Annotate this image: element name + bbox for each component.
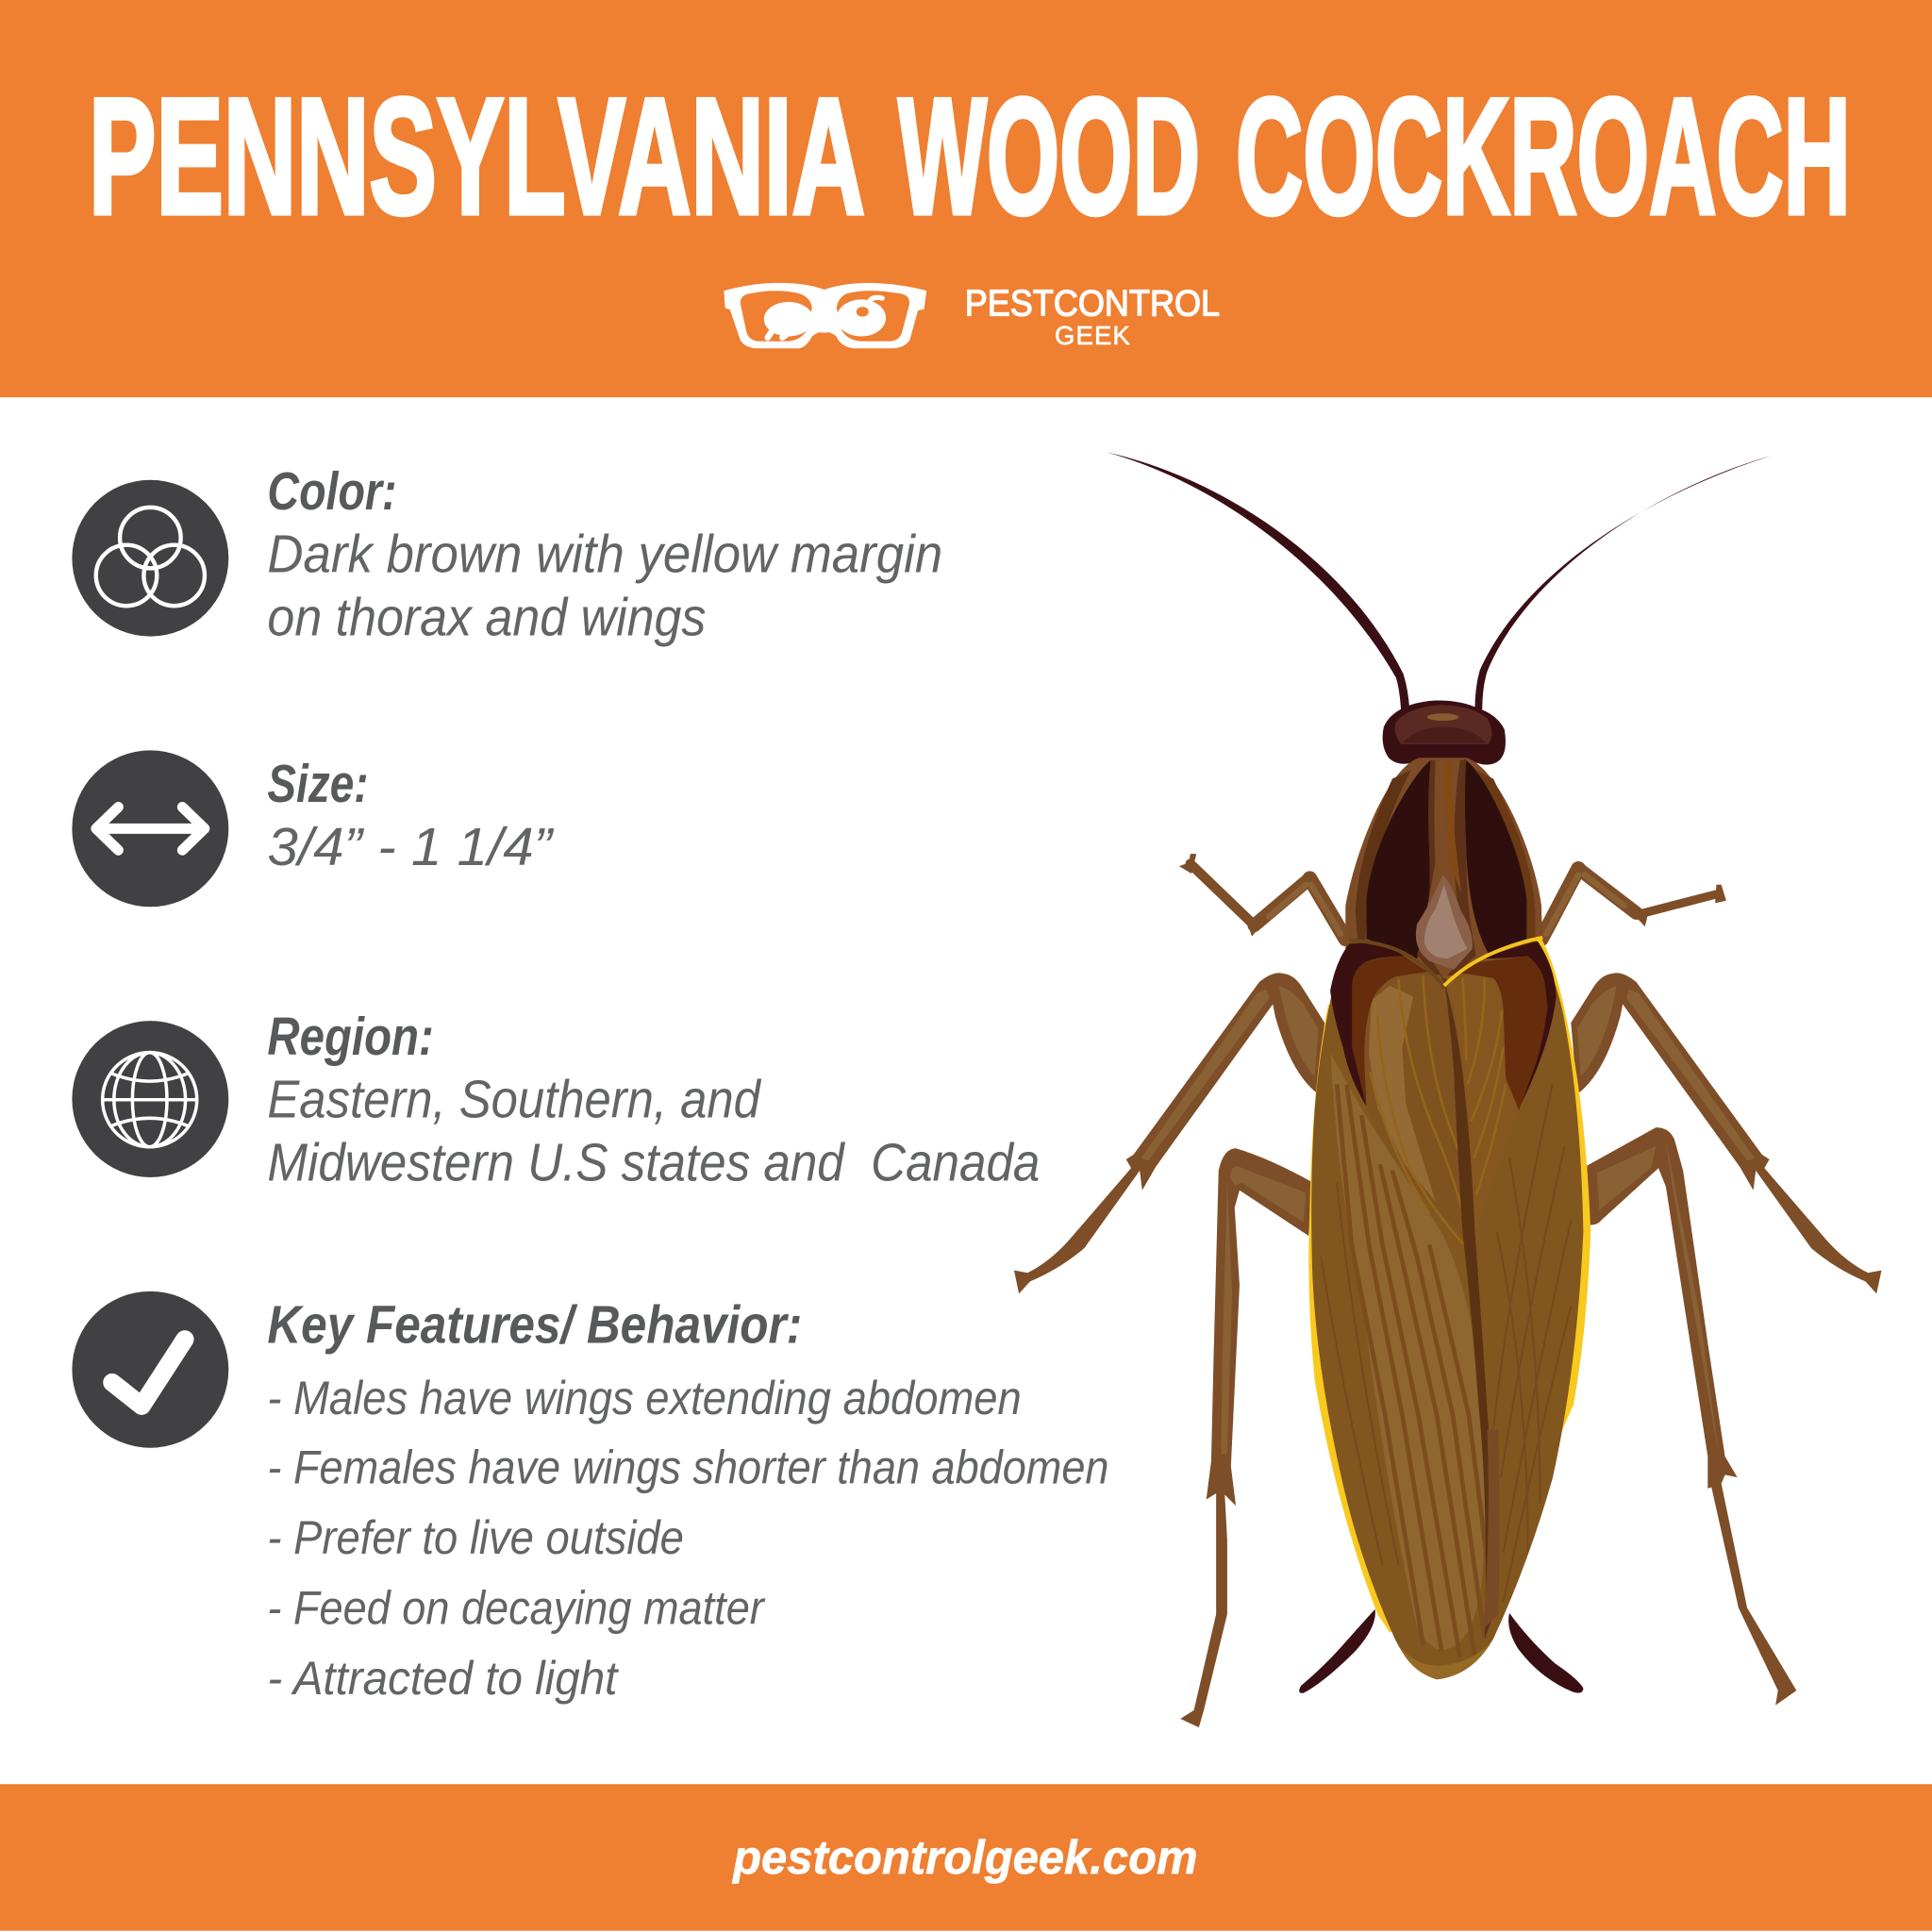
logo: glasses with ant: [724, 283, 926, 348]
logo wordmark: [965, 283, 1220, 350]
title: PENNSYLVANIA: [89, 65, 865, 249]
left wing upper lobe: [1364, 974, 1469, 1242]
size text: [267, 754, 555, 876]
hind legs: [1180, 1127, 1796, 1727]
front legs: [1179, 854, 1726, 939]
key features text: - Prefer to live outside: [267, 1511, 684, 1564]
key features text: - Females have wings shorter than abdomen: [267, 1441, 1109, 1493]
footer url: pestcontrolgeek.com: [731, 1831, 1198, 1884]
icon: globe: [72, 1021, 228, 1177]
region text: [267, 1007, 1040, 1191]
left wing striped lobe: [1331, 1054, 1486, 1650]
panel: color: [72, 461, 942, 646]
head: [1383, 700, 1506, 765]
right wing veins: [1321, 1084, 1571, 1602]
antennae: [1107, 452, 1771, 709]
tail tip: [1398, 1639, 1493, 1679]
middle legs: [1014, 973, 1881, 1293]
pronotum: [1345, 758, 1542, 989]
key features text: Key Features/ Behavior:: [267, 1294, 802, 1354]
logo wordmark: PESTCONTROL: [965, 283, 1220, 324]
panel: key features: [72, 1291, 1109, 1705]
region text: Eastern, Southern, and: [267, 1070, 761, 1129]
icon: double arrow: [72, 750, 228, 907]
central dark streak: [1444, 979, 1498, 1639]
key features text: [267, 1294, 1109, 1705]
region text: Midwestern U.S states and Canada: [267, 1132, 1040, 1191]
right shoulder: [1481, 941, 1557, 1110]
key features text: - Attracted to light: [267, 1652, 619, 1705]
panel: size: [72, 750, 555, 907]
size text: Size:: [267, 754, 369, 813]
color text: Color:: [267, 461, 397, 521]
color text: Dark brown with yellow margin: [267, 525, 942, 584]
color text: on thorax and wings: [267, 587, 706, 646]
title: WOOD: [898, 65, 1200, 249]
left shoulder: [1330, 943, 1404, 1107]
region text: Region:: [267, 1007, 434, 1066]
color text: [267, 461, 942, 646]
cerci: [1299, 1609, 1583, 1693]
key features text: - Feed on decaying matter: [267, 1581, 766, 1634]
wings body: [1308, 937, 1591, 1679]
right wing upper lobe: [1445, 974, 1519, 1232]
footer band: [0, 1784, 1932, 1931]
header band: [0, 0, 1932, 397]
icon: three overlapping circles: [72, 480, 228, 637]
panel: region: [72, 1007, 1040, 1191]
logo wordmark: GEEK: [1055, 321, 1130, 350]
cockroach illustration: [1014, 452, 1881, 1727]
key features text: - Males have wings extending abdomen: [267, 1372, 1022, 1424]
yellow margin: [1308, 937, 1591, 1633]
size text: 3/4” - 1 1/4”: [267, 817, 555, 876]
wing base: [1311, 949, 1583, 1679]
icon: check mark: [72, 1291, 228, 1448]
